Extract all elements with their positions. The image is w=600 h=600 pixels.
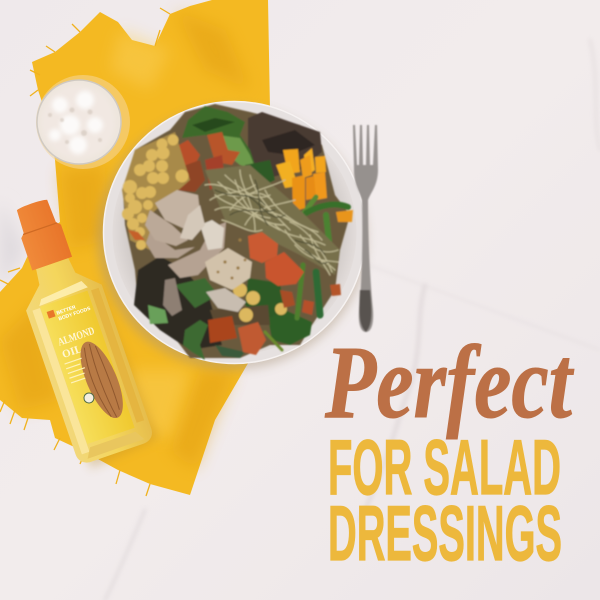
brand logo: BETTER — [56, 304, 77, 317]
bottle shadow — [36, 285, 161, 468]
glass body with oil — [14, 251, 155, 466]
tomatoes centre — [248, 232, 278, 263]
product label — [40, 290, 137, 444]
yellow napkin — [0, 0, 290, 496]
chickpeas — [122, 132, 287, 322]
chicken slices — [146, 232, 195, 258]
almond oil bottle — [0, 189, 161, 471]
mushroom — [163, 278, 182, 316]
top greens — [182, 106, 256, 168]
product name line two: OIL — [61, 343, 84, 361]
tomatoes upper — [168, 140, 200, 172]
bowl — [97, 102, 367, 370]
shoulder highlight — [36, 280, 88, 306]
organic seal — [83, 392, 95, 404]
almond illustration — [71, 334, 132, 425]
bottom greens — [268, 310, 312, 345]
food base layer — [123, 104, 350, 358]
dark meat, upper right — [248, 112, 322, 180]
green beans — [265, 197, 348, 350]
salad food — [122, 104, 353, 360]
brand logo — [47, 298, 92, 325]
product name: ALMOND — [56, 325, 96, 349]
tomatoes lower — [208, 316, 237, 343]
orange cap — [12, 197, 72, 270]
fork — [353, 125, 378, 332]
tiny label copy — [65, 358, 88, 383]
sprouts — [205, 165, 340, 275]
crumbled nuts — [205, 248, 252, 290]
brand logo: BODY FOODS — [58, 306, 92, 322]
yellow peppers — [276, 148, 353, 222]
dark greens, lower left — [134, 256, 222, 350]
glass of iced drink — [36, 75, 130, 169]
